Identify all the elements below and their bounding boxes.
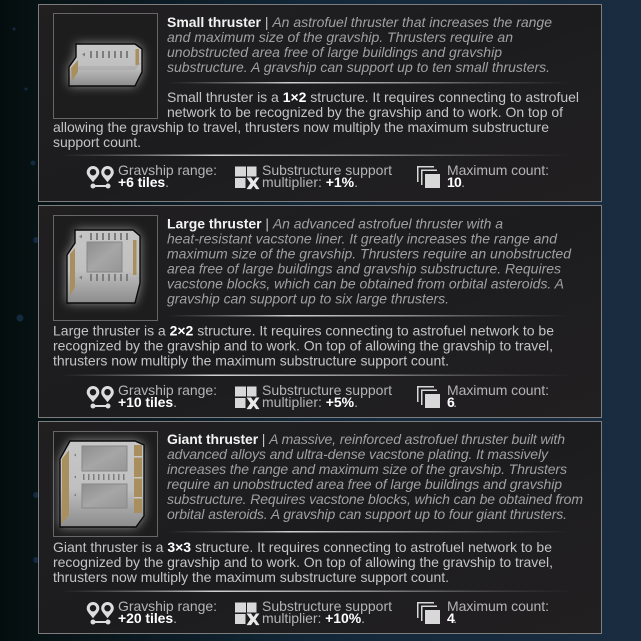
panel: large thruster [38,206,602,418]
title and description: substructure. Requires vacstone blocks, which can be obtained from [167,491,583,507]
body text [53,322,554,368]
stat: substructure support: multiplier: +5%. [262,394,358,410]
stat: gravship range [87,162,217,190]
body text: Giant thruster is a 3×3 structure. It requires connecting to astrofuel network to be [53,539,552,555]
stat: substructure support: Substructure support [262,382,392,398]
title and description: gravship can support up to six large thrusters. [167,290,449,306]
icon: giant thruster [54,432,158,536]
body text: network to be recognized by the gravship and to work. On top of [167,104,563,120]
panel: giant thruster [38,422,602,634]
stat: gravship range: Gravship range: [118,162,217,178]
title and description: maximum size of the gravship. Thrusters require an unobstructed [167,246,572,262]
title and description: vacstone blocks, which can be obtained from orbital asteroids. A [167,276,564,292]
body text: allowing the gravship to travel, thrusters now multiply the maximum substructure [53,119,549,135]
stat: gravship range: +20 tiles. [118,610,177,626]
title and description [167,14,552,75]
stat: gravship range [87,598,217,626]
title and description [167,431,583,522]
stat: substructure support [235,598,392,626]
title and description: Giant thruster | A massive, reinforced astrofuel thruster built with [167,431,565,447]
body text [53,539,553,585]
stat: maximum count [417,382,549,410]
stat: maximum count: Maximum count: [447,598,549,614]
stat: maximum count: 4. [447,610,457,626]
stat: maximum count [417,162,549,190]
title and description: increases the range and maximum size of the gravship. Thrusters [167,461,567,477]
title and description: heat-resistant vacstone liner. It greatly increases the range and [167,230,558,246]
icon: large thruster [54,216,158,320]
stat: gravship range [87,382,217,410]
title and description: orbital asteroids. A gravship can support up to four giant thrusters. [167,506,567,522]
stat: substructure support: multiplier: +1%. [262,174,358,190]
body text: Small thruster is a 1×2 structure. It requires connecting to astrofuel [167,89,579,105]
body text: support count. [53,134,141,150]
stat: maximum count: Maximum count: [447,382,549,398]
body text: thrusters now multiply the maximum substructure support count. [53,352,449,368]
title and description: require an unobstructed area free of large buildings and gravship [167,476,562,492]
stat: maximum count: Maximum count: [447,162,549,178]
panel: small thruster [38,4,602,202]
title and description: substructure. A gravship can support up to ten small thrusters. [167,59,550,75]
title and description: unobstructed area free of large buildings and gravship [167,44,502,60]
stat: substructure support: multiplier: +10%. [262,610,365,626]
title and description: Small thruster | An astrofuel thruster that increases the range [167,14,552,30]
title and description: and maximum size of the gravship. Thrusters require an [167,29,513,45]
stat: maximum count [417,598,549,626]
stat: gravship range: +6 tiles. [118,174,169,190]
stat: substructure support: Substructure support [262,162,392,178]
stat: gravship range: +10 tiles. [118,394,177,410]
stat: maximum count: 6. [447,394,457,410]
title and description: area free of large buildings and gravship substructure. Requires [167,260,561,276]
stat: gravship range: Gravship range: [118,598,217,614]
title and description [167,216,572,306]
body text: Large thruster is a 2×2 structure. It requires connecting to astrofuel network to be [53,322,554,338]
stat: substructure support: Substructure support [262,598,392,614]
body text: thrusters now multiply the maximum substructure support count. [53,569,449,585]
stat: gravship range: Gravship range: [118,382,217,398]
title and description: advanced alloys and ultra-dense vacstone plating. It massively [167,446,549,462]
stat: substructure support [235,382,392,410]
title and description: Large thruster | An advanced astrofuel thruster with a [167,216,503,232]
stat: substructure support [235,162,392,190]
stat: maximum count: 10. [447,174,465,190]
body text: recognized by the gravship and to work. On top of allowing the gravship to travel, [53,554,553,570]
body text: recognized by the gravship and to work. On top of allowing the gravship to travel, [53,338,553,354]
icon: small thruster [54,14,158,118]
body text [53,89,579,150]
